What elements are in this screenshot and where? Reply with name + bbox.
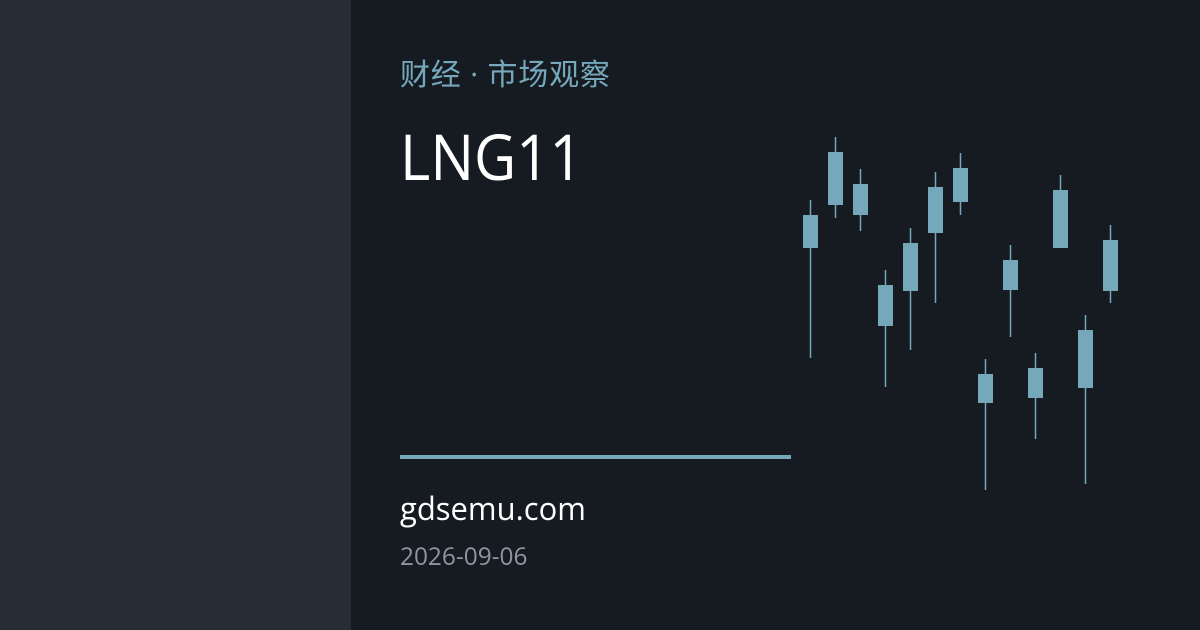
heading: title: LNG11 (400, 114, 583, 199)
text: date: 2026-09-06 (400, 539, 527, 573)
text: category label: 财经 · 市场观察 (400, 53, 611, 94)
accent rule (400, 455, 791, 459)
panel: left sidebar (0, 0, 351, 630)
chart: candlesticks (803, 137, 1118, 490)
text: site domain: gdsemu.com (400, 487, 586, 530)
